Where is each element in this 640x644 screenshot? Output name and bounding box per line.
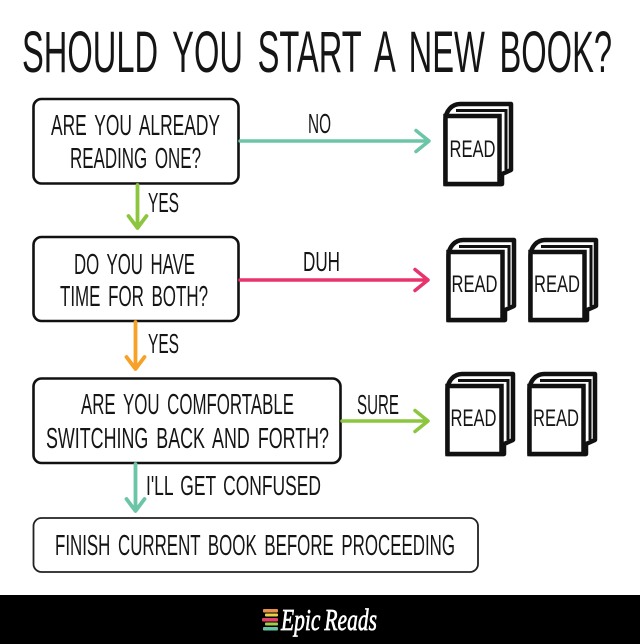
icon: book read: READ <box>450 136 496 163</box>
box: are you comfortable switching back and forth <box>34 378 340 463</box>
icon: book read <box>448 374 513 454</box>
box: do you have time for both <box>34 237 238 321</box>
arrow: duh <box>240 246 428 290</box>
icon: book read <box>446 104 511 184</box>
box: are you comfortable switching back and forth: SWITCHING BACK AND FORTH? <box>46 423 329 455</box>
box: are you comfortable switching back and forth: ARE YOU COMFORTABLE <box>81 389 294 421</box>
arrow: i'll get confused: I'LL GET CONFUSED <box>146 470 321 501</box>
footer bar <box>0 595 640 644</box>
icon: book read <box>448 240 514 320</box>
arrow: no <box>240 108 429 152</box>
arrow: sure: SURE <box>357 389 399 420</box>
arrow: sure <box>342 389 428 432</box>
arrow: yes (orange): YES <box>148 328 179 359</box>
arrow: yes (orange) <box>126 322 179 369</box>
icon: stacked books <box>262 609 278 630</box>
logo: epic reads: Epic Reads <box>280 602 377 637</box>
icon: book read <box>530 240 596 320</box>
box: do you have time for both: TIME FOR BOTH? <box>60 281 208 313</box>
icon: book read <box>530 374 595 454</box>
arrow: i'll get confused <box>126 464 321 511</box>
box: are you already reading one: READING ONE? <box>70 143 201 175</box>
arrow: duh: DUH <box>303 246 340 277</box>
arrow: yes (green): YES <box>148 187 179 218</box>
box: do you have time for both: DO YOU HAVE <box>74 249 195 281</box>
arrow: yes (green) <box>128 185 179 228</box>
logo: epic reads <box>262 602 377 637</box>
box: finish current book <box>34 518 478 572</box>
box: are you already reading one <box>34 99 238 184</box>
icon: book read: READ <box>533 405 579 432</box>
arrow: no: NO <box>308 108 331 139</box>
icon: book read: READ <box>452 271 498 298</box>
icon: book read: READ <box>534 271 580 298</box>
box: are you already reading one: ARE YOU ALREADY <box>51 110 220 142</box>
icon: book read: READ <box>450 405 496 432</box>
